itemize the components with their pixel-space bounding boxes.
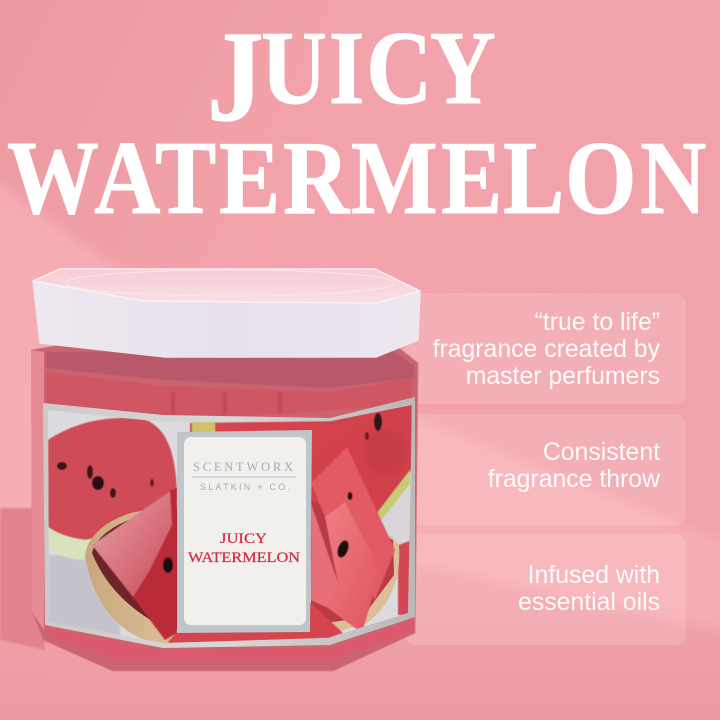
panel text: consistent throw: fragrance throw xyxy=(488,466,660,493)
watermelon chunks xyxy=(92,447,395,644)
panel text: consistent throw xyxy=(488,439,660,493)
photo background texture xyxy=(48,554,120,635)
scent name xyxy=(188,531,300,566)
label strip xyxy=(43,397,415,648)
lid xyxy=(33,269,420,357)
small front label xyxy=(177,430,312,633)
panel text: consistent throw: Consistent xyxy=(543,439,660,466)
panel text: true to life: master perfumers xyxy=(466,363,660,390)
scent name: WATERMELON xyxy=(188,550,300,566)
panel text: true to life: “true to life” xyxy=(535,309,660,336)
title xyxy=(7,5,706,236)
candle jar xyxy=(31,269,420,671)
wax top xyxy=(46,352,414,388)
bowl xyxy=(85,505,177,645)
glass body xyxy=(32,345,418,671)
panel: true to life xyxy=(405,293,686,404)
panel text: true to life: fragrance created by xyxy=(433,336,661,363)
wax cube lines xyxy=(173,392,280,414)
title line: WATERMELON: WATERMELON xyxy=(7,120,706,236)
label photo xyxy=(40,400,420,650)
panel text: essential oils: Infused with xyxy=(528,562,660,589)
title line: JUICY: JUICY xyxy=(207,5,496,149)
left melon xyxy=(48,418,177,560)
jar shadow xyxy=(0,508,45,650)
panel text: true to life xyxy=(433,309,661,390)
panel text: essential oils xyxy=(518,562,660,616)
scent name: JUICY xyxy=(220,531,267,547)
panel: consistent throw xyxy=(405,414,686,525)
panel: essential oils xyxy=(405,534,686,645)
panel text: essential oils: essential oils xyxy=(518,589,660,616)
wax bottom xyxy=(45,620,414,660)
sub-brand text: SLATKIN + CO. xyxy=(200,482,290,492)
right melon xyxy=(190,404,412,615)
brand text: SCENTWORX xyxy=(193,460,293,474)
